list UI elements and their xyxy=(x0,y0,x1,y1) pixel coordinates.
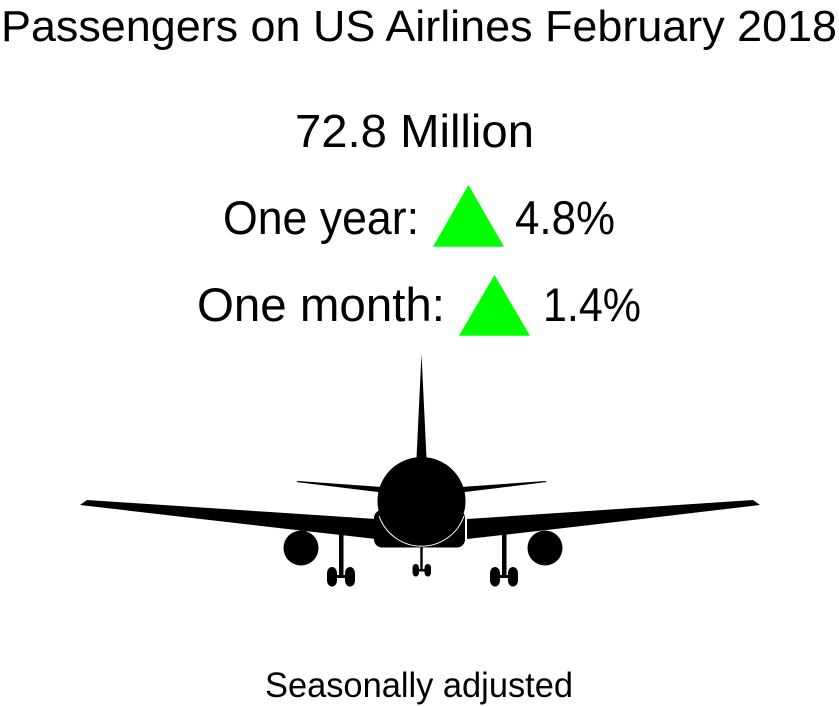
engines xyxy=(284,530,318,566)
fuselage circle xyxy=(378,457,466,545)
nose landing gear xyxy=(412,545,431,576)
fuselage highlight arc xyxy=(379,516,464,546)
tail fin xyxy=(416,354,426,458)
one year change row xyxy=(223,185,615,247)
one month value: 1.4% xyxy=(543,278,641,331)
wings xyxy=(80,500,376,539)
one year label: One year: xyxy=(223,191,419,244)
headline figure: 72.8 million: 72.8 Million xyxy=(295,105,534,157)
title: Passengers on US Airlines February 2018 xyxy=(1,2,837,51)
horizontal stabilizers xyxy=(296,481,382,492)
icon: green up triangle, one month xyxy=(459,275,530,336)
icon: airplane front view xyxy=(80,354,760,586)
main landing gear, left xyxy=(327,530,355,586)
one month label: One month: xyxy=(197,278,445,331)
one year value: 4.8% xyxy=(515,191,615,244)
icon: green up triangle, one year xyxy=(433,185,504,247)
main landing gear, right xyxy=(490,530,518,586)
one month change row xyxy=(197,275,641,336)
footnote: Seasonally adjusted xyxy=(265,666,573,705)
lower fuselage fairing xyxy=(374,510,465,548)
